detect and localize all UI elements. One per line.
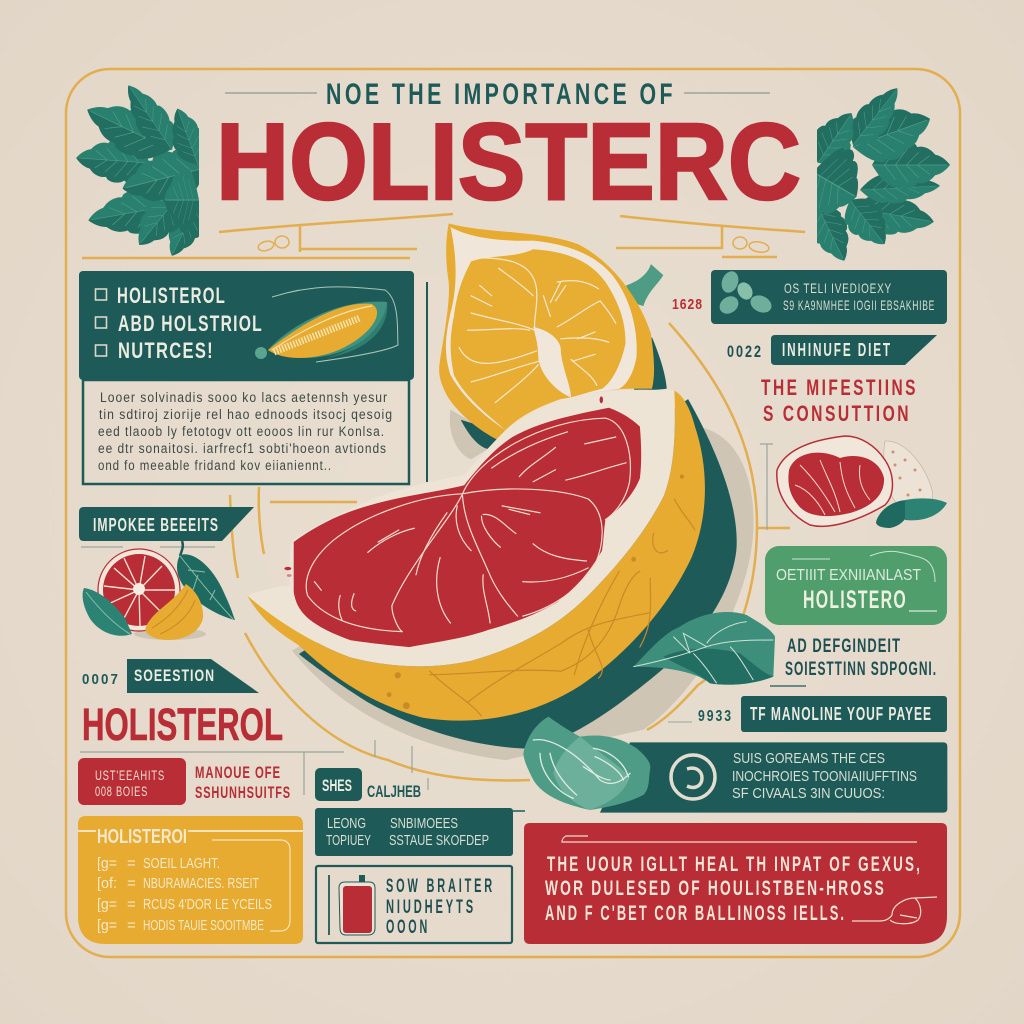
icon: small bowl bbox=[852, 897, 937, 924]
upper lemon flesh bbox=[451, 249, 625, 430]
heading: holisterol: HOLISTEROL bbox=[82, 699, 283, 750]
panel: yellow holisterol list: [of: bbox=[97, 875, 117, 892]
checklist: NUTRCES! bbox=[118, 338, 214, 363]
guide arcs bbox=[230, 323, 790, 780]
text block: intro bbox=[83, 380, 409, 484]
panel: yellow holisterol list: [g= bbox=[97, 917, 117, 934]
panel: teal topics: SNBIMOEES bbox=[390, 815, 458, 832]
text block: intro: tin sdtiroj ziorije rel hao ednoods itsocj qesoig bbox=[99, 407, 393, 422]
text block: intro: ond fo meeable fridand kov eiianiennt.. bbox=[98, 458, 332, 473]
heading: the mifestiins bbox=[761, 375, 918, 426]
big fruit teal skin bbox=[299, 399, 737, 749]
heading: the mifestiins: THE MIFESTIINS bbox=[761, 375, 918, 400]
panel: jar note: SOW BRAITER bbox=[386, 876, 495, 897]
banner: improve benefits bbox=[79, 507, 254, 541]
text block: intro: Looer solvinadis sooo ko lacs aetennsh yesur bbox=[100, 390, 388, 405]
big fruit pith bbox=[247, 390, 675, 666]
banner: manoline your payee bbox=[741, 696, 947, 732]
big fruit shadow bbox=[292, 427, 754, 760]
panel: yellow holisterol list: [g= bbox=[97, 855, 117, 872]
red tag bbox=[78, 758, 186, 805]
panel: yellow holisterol list: = bbox=[127, 875, 136, 892]
panel: yellow holisterol list: = bbox=[127, 896, 136, 913]
panel: top right info: OS TELI IVEDIOEXY bbox=[784, 280, 892, 296]
banner: manoline your payee: TF MANOLINE YOUF PAYEE bbox=[750, 704, 932, 724]
icon: corn pod bbox=[255, 287, 398, 362]
icon: citrus with leaves bbox=[81, 541, 235, 640]
label: 0022: 0022 bbox=[727, 342, 763, 361]
label: 1628: 1628 bbox=[672, 296, 703, 313]
panel: yellow holisterol list: SOEIL LAGHT. bbox=[143, 855, 220, 872]
red caption bbox=[195, 763, 291, 802]
text: ad definition bbox=[770, 636, 937, 686]
flesh veins bbox=[306, 418, 630, 632]
upper lemon rind bbox=[439, 223, 654, 440]
label: number 0007: 0007 bbox=[82, 671, 120, 688]
red caption: MANOUE OFE bbox=[195, 763, 281, 782]
red drips bbox=[284, 396, 603, 577]
banner: improve benefits: IMPOKEE BEEEITS bbox=[93, 515, 219, 535]
upper lemon pith bbox=[446, 227, 637, 430]
rind dots bbox=[387, 475, 684, 709]
main illustration: fruit bbox=[247, 223, 754, 760]
banner: soeestion: SOEESTION bbox=[134, 666, 215, 685]
label: 9933 bbox=[668, 708, 733, 725]
panel: green holistero: OETIIIT EXNIIANLAST bbox=[776, 567, 921, 584]
checklist: HOLISTEROL bbox=[117, 283, 226, 308]
divider line bbox=[426, 282, 428, 482]
panel: dark legend text bbox=[671, 750, 917, 802]
big fruit yellow rind bbox=[247, 390, 705, 721]
panel: dark legend text: SUIS GOREAMS THE CES bbox=[733, 750, 885, 767]
panel: yellow holisterol list: HODIS TAUIE SOOITMBE bbox=[143, 917, 264, 934]
upper lemon backing bbox=[450, 264, 667, 459]
icon: cut meat with leaf bbox=[760, 436, 947, 530]
label: 9933: 9933 bbox=[698, 708, 733, 725]
panel: jar note: OOON bbox=[386, 917, 430, 938]
panel: red health impact bbox=[524, 823, 947, 944]
left leaf cluster bbox=[76, 85, 199, 256]
right leaf cluster bbox=[817, 88, 950, 261]
icon: jar bbox=[339, 875, 375, 935]
shell-shaped green leaf bbox=[523, 717, 650, 810]
big fruit red flesh bbox=[294, 408, 641, 647]
icon: leaves bbox=[716, 269, 774, 317]
panel: red health impact: AND F C'BET COR BALLINOSS IELLS. bbox=[545, 902, 846, 925]
panel: yellow holisterol list bbox=[78, 816, 303, 944]
checklist bbox=[96, 283, 263, 363]
title: HOLISTERC bbox=[216, 101, 801, 223]
decorative title rules right bbox=[616, 216, 805, 257]
panel: dark legend text: SF CIVAALS 3IN CUUOS: bbox=[732, 785, 885, 802]
outer frame bbox=[66, 69, 960, 957]
panel: yellow holisterol list: = bbox=[127, 917, 136, 934]
heading: the mifestiins: S CONSUTTION bbox=[763, 401, 911, 426]
decorative title rules left bbox=[82, 214, 453, 258]
panel: teal topics: TOPIUEY bbox=[326, 832, 371, 849]
rind veins bbox=[430, 499, 695, 716]
banner: inhinufe diet: INHINUFE DIET bbox=[782, 340, 892, 360]
text block: intro: eed tlaoob ly fetotogv ott eooos lin rur Konlsa. bbox=[98, 424, 385, 439]
red caption: SSHUNHSUITFS bbox=[195, 783, 291, 802]
panel: holisterol nutrients bbox=[79, 271, 414, 380]
panel: teal topics bbox=[315, 808, 525, 856]
red tag: 008 BOIES bbox=[95, 783, 148, 799]
lemon veins bbox=[459, 258, 616, 403]
panel: jar note: NIUDHEYTS bbox=[386, 897, 476, 918]
large green leaf bbox=[633, 612, 775, 685]
panel: dark legend text: INOCHROIES TOONIAIIUFFTINS bbox=[732, 768, 917, 785]
text: ad definition: AD DEFGINDEIT bbox=[787, 636, 901, 657]
panel: top right info bbox=[711, 269, 947, 324]
panel: green holistero: HOLISTERO bbox=[803, 586, 907, 614]
panel: green holistero bbox=[765, 546, 947, 625]
panel: jar note bbox=[316, 866, 512, 943]
lemon core bbox=[533, 327, 571, 397]
banner: inhinufe diet bbox=[771, 335, 937, 365]
subtitle: NOE THE IMPORTANCE OF bbox=[326, 78, 676, 111]
small tag: shes: SHES bbox=[322, 776, 352, 795]
banner: soeestion bbox=[127, 659, 259, 693]
panel: teal topics: SSTAUE SKOFDEP bbox=[389, 832, 489, 849]
panel: teal topics: LEONG bbox=[327, 815, 366, 832]
text: ad definition: SOIESTTINN SDPOGNI. bbox=[785, 659, 937, 680]
red tag: UST'EEAHITS bbox=[95, 767, 165, 783]
panel: yellow holisterol list: RCUS 4'DOR LE YCEILS bbox=[143, 896, 272, 913]
lower teal panel bbox=[600, 742, 947, 813]
small tag: shes bbox=[315, 768, 362, 801]
panel: yellow holisterol list: HOLISTEROI bbox=[97, 826, 187, 848]
panel: yellow holisterol list: NBURAMACIES. RSEIT bbox=[143, 875, 259, 892]
checklist: ABD HOLSTRIOL bbox=[118, 311, 263, 336]
text block: intro: ee dtr sonaitosi. iarfrecf1 sobti'hoeon avtionds bbox=[98, 441, 387, 456]
panel: yellow holisterol list: = bbox=[127, 855, 136, 872]
panel: yellow holisterol list: [g= bbox=[97, 896, 117, 913]
label: caljheb: CALJHEB bbox=[367, 782, 421, 801]
